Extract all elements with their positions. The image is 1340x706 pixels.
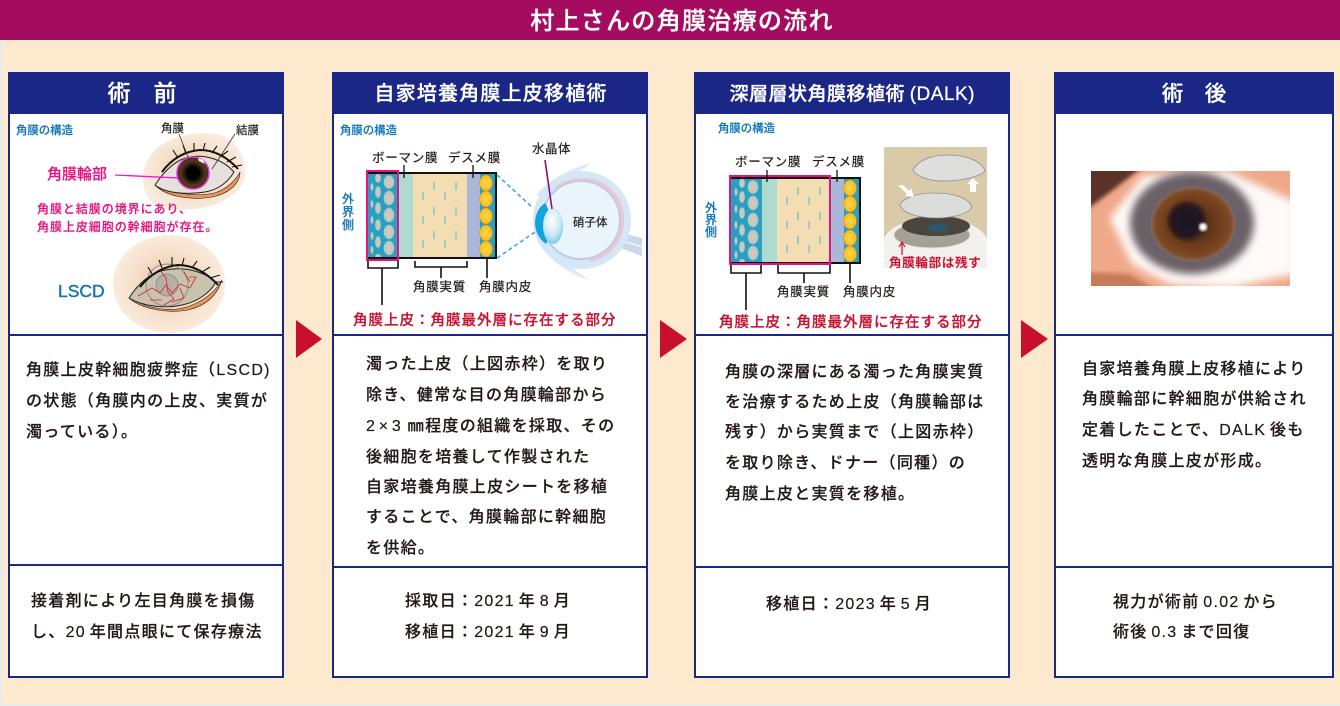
divider <box>332 335 648 567</box>
photo: postoperative eye <box>1091 171 1290 286</box>
heading: 自家培養角膜上皮移植術 <box>332 72 648 114</box>
brackets and labels: 角膜実質 <box>413 279 466 294</box>
icon: eyeball cross-section <box>532 142 642 280</box>
caption: 角膜の構造: 角膜の構造 <box>340 123 398 137</box>
labels: ボーマン膜 デスメ膜: デスメ膜 <box>812 154 865 169</box>
label: 外界側: 側 <box>705 225 717 239</box>
labels: ボーマン膜 デスメ膜: ボーマン膜 <box>372 151 438 165</box>
arrow <box>660 320 687 358</box>
label: LSCD: LSCD <box>58 281 105 301</box>
figure: 角膜輪部 and LSCD eye illustrations <box>16 122 259 333</box>
icon: eyeball cross-section: 硝子体 <box>573 215 608 229</box>
icon: LSCD eye <box>113 235 225 333</box>
caption: 角膜の構造: 角膜の構造 <box>16 123 74 137</box>
diagram: cornea layers <box>731 178 860 263</box>
frame: 上皮 <box>367 171 398 260</box>
text: 術式の説明: することで、角膜輪部に幹細胞 <box>366 508 607 526</box>
label: 外界側: 界 <box>705 213 717 227</box>
text: 術式の説明: 角膜の深層にある濁った角膜実質 <box>725 363 985 381</box>
text: 視力: 術後 0.3 まで回復 <box>1113 623 1250 641</box>
illustration: DALK graft: 角膜輪部は残す <box>889 255 981 270</box>
divider <box>8 335 284 565</box>
icon: eyeball cross-section: 水晶体 <box>532 142 571 156</box>
heading: 術前 <box>8 72 284 114</box>
text: 術式の説明: 残す）から実質まで（上図赤枠） <box>725 422 985 441</box>
panel: 深層層状角膜移植術 <box>694 72 1010 677</box>
text: 症状の説明: の状態（角膜内の上皮、実質が <box>26 391 268 410</box>
heading: 深層層状角膜移植術 (DALK) <box>694 72 1010 114</box>
text: 術式の説明: 角膜上皮と実質を移植。 <box>725 485 915 503</box>
label: 角膜輪部 <box>47 165 178 183</box>
labels: ボーマン膜 デスメ膜: ボーマン膜 <box>735 155 801 169</box>
text: 結果の説明: 角膜輪部に幹細胞が供給され <box>1082 389 1307 408</box>
arrow <box>296 320 322 358</box>
text: 術式の説明: 後細胞を培養して作製された <box>366 448 590 466</box>
text: 症状の説明: 角膜上皮幹細胞疲弊症（LSCD) <box>26 361 271 379</box>
text: 症状の説明: 濁っている）。 <box>26 423 138 441</box>
divider <box>694 335 1010 567</box>
illustration: DALK graft <box>884 147 987 270</box>
text: 角膜輪部の説明: 角膜と結膜の境界にあり、 <box>37 201 192 216</box>
heading: 術後 <box>1054 72 1334 114</box>
labels: ボーマン膜 デスメ膜 <box>735 154 865 182</box>
text: 結果の説明: 透明な角膜上皮が形成。 <box>1082 451 1272 470</box>
title bar <box>0 0 1340 40</box>
text: 術式の説明: を取り除き、ドナー（同種）の <box>725 454 966 472</box>
label: 角膜 <box>161 122 190 162</box>
text: 日付: 採取日：2021 年 8 月 <box>405 592 571 610</box>
dashed zoom lines <box>497 175 535 258</box>
label: 角膜: 角膜 <box>161 122 184 135</box>
text: 日付: 移植日：2023 年 5 月 <box>766 595 932 613</box>
label: 結膜: 結膜 <box>236 124 259 137</box>
text: 経過: 接着剤により左目角膜を損傷 <box>31 592 256 610</box>
heading: 深層層状角膜移植術 (DALK): 深層層状角膜移植術 (DALK) <box>730 83 974 105</box>
text: 術式の説明: 自家培養角膜上皮シートを移植 <box>366 478 608 496</box>
text: 術式の説明: 濁った上皮（上図赤枠）を取り <box>366 355 608 373</box>
brackets and labels: 角膜内皮 <box>479 280 532 294</box>
figure: 角膜の構造 <box>705 121 987 331</box>
text: 術式の説明: を供給。 <box>366 539 435 557</box>
label: 外界側: 側 <box>342 218 354 232</box>
icon: healthy eye <box>143 133 245 210</box>
caption: 角膜の構造: 角膜の構造 <box>718 121 776 135</box>
panel: 自家培養角膜上皮移植術 <box>332 72 648 677</box>
panel: 術前 <box>8 72 284 677</box>
brackets and labels: 角膜実質 <box>777 284 830 299</box>
text: 術式の説明: を治療するため上皮（角膜輪部は <box>725 393 985 411</box>
text: 結果の説明: 定着したことで、DALK 後も <box>1082 421 1305 439</box>
callout: 角膜上皮: 角膜上皮：角膜最外層に存在する部分 <box>353 311 616 329</box>
label: 外界側: 界 <box>342 205 354 219</box>
frame: 上皮と実質 <box>730 176 830 264</box>
labels: ボーマン膜 デスメ膜: デスメ膜 <box>448 150 501 165</box>
heading: 術前: 術 前 <box>108 80 176 106</box>
label: 外界側: 外 <box>705 200 717 215</box>
label: 外界側: 外 <box>342 191 354 206</box>
diagram: cornea layers <box>367 173 496 258</box>
text: 術式の説明: 除き、健常な目の角膜輪部から <box>366 386 607 404</box>
heading: 自家培養角膜上皮移植術: 自家培養角膜上皮移植術 <box>374 82 608 105</box>
heading: 術後: 術 後 <box>1162 82 1227 106</box>
label: 角膜輪部: 角膜輪部 <box>47 165 107 183</box>
text: 経過: し、20 年間点眼にて保存療法 <box>31 623 263 641</box>
callout: 角膜上皮: 角膜上皮：角膜最外層に存在する部分 <box>719 313 982 331</box>
title bar: 村上さんの角膜治療の流れ <box>530 8 834 35</box>
text: 日付: 移植日：2021 年 9 月 <box>405 623 571 641</box>
text: 角膜輪部の説明: 角膜上皮細胞の幹細胞が存在。 <box>37 219 218 234</box>
text: 術式の説明: 2×3 ㎜程度の組織を採取、その <box>366 418 615 435</box>
text: 結果の説明: 自家培養角膜上皮移植により <box>1082 360 1307 378</box>
labels: ボーマン膜 デスメ膜 <box>372 150 501 178</box>
text: 視力: 視力が術前 0.02 から <box>1113 592 1278 611</box>
panel: 術後 <box>1054 72 1334 677</box>
figure: 角膜の構造 <box>340 123 642 329</box>
brackets and labels: 角膜内皮 <box>843 285 896 299</box>
divider <box>1054 335 1334 567</box>
brackets and labels <box>368 258 532 305</box>
brackets and labels <box>731 263 896 310</box>
label: 結膜 <box>212 124 259 169</box>
arrow <box>1021 320 1048 358</box>
